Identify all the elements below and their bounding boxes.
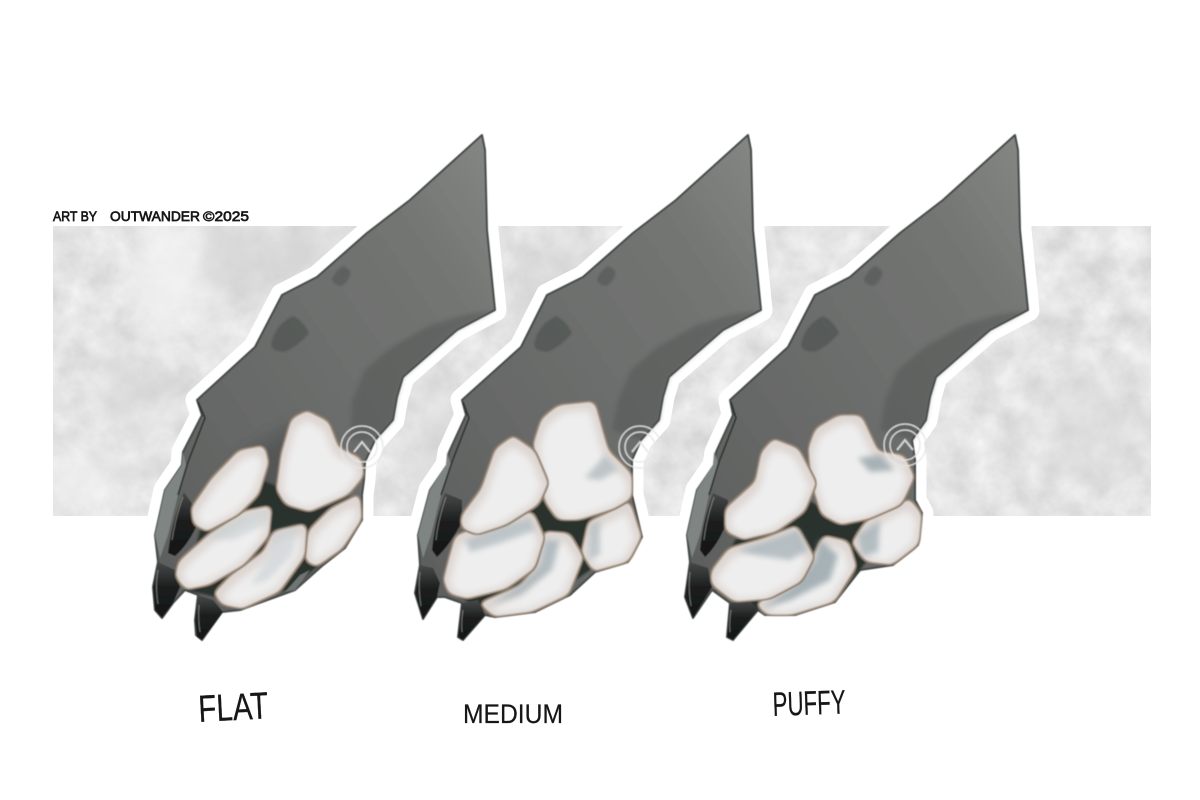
pad shadow: upper bbox=[585, 455, 618, 480]
claws: puffy bbox=[685, 493, 758, 640]
web between pads: puffy bbox=[715, 495, 890, 610]
pad shadow: middle bbox=[738, 530, 808, 560]
watermark ring: puffy bbox=[884, 424, 926, 466]
credit line bbox=[53, 208, 249, 224]
pads: flat bbox=[305, 493, 362, 567]
leg silhouette: flat bbox=[153, 135, 495, 640]
pads: puffy bbox=[851, 498, 922, 565]
leg shading and marks: medium bbox=[418, 266, 761, 558]
pad shadow: lower bbox=[250, 526, 300, 585]
pads: medium bbox=[581, 500, 642, 572]
pad shadow: right bbox=[588, 520, 600, 560]
label: flat: FLAT bbox=[197, 685, 269, 731]
leg shading and marks: puffy bbox=[687, 266, 1028, 558]
leg silhouette: puffy bbox=[685, 135, 1028, 640]
leg silhouette: medium bbox=[415, 135, 761, 640]
textured grey background band bbox=[40, 220, 1151, 516]
pad shadow: upper bbox=[858, 455, 895, 472]
watermark ring: flat bbox=[341, 426, 383, 468]
pad shadow: middle bbox=[205, 510, 270, 540]
white halo around the three paws bbox=[153, 135, 1028, 640]
pad shadow: right bbox=[858, 520, 880, 556]
claws: flat bbox=[153, 492, 223, 640]
label: puffy: PUFFY bbox=[772, 683, 846, 724]
pad shadow: middle bbox=[465, 518, 536, 552]
label: medium: MEDIUM bbox=[463, 699, 563, 729]
web between pads: medium bbox=[450, 490, 625, 610]
paw: medium bbox=[415, 135, 761, 640]
leg shading and marks: flat bbox=[155, 266, 495, 558]
web between pads: flat bbox=[185, 480, 350, 600]
paw: flat bbox=[153, 135, 495, 640]
paw: puffy bbox=[685, 135, 1028, 640]
dewclaw sliver: flat bbox=[285, 570, 310, 592]
credit line: OUTWANDER bbox=[110, 208, 200, 224]
pad shadow: lower bbox=[762, 540, 838, 608]
claws: medium bbox=[415, 493, 485, 640]
credit line: ©2025 bbox=[203, 208, 249, 224]
watermark ring: medium bbox=[619, 426, 661, 468]
credit line: ART BY bbox=[53, 208, 98, 224]
pad shadow: lower bbox=[490, 540, 560, 605]
